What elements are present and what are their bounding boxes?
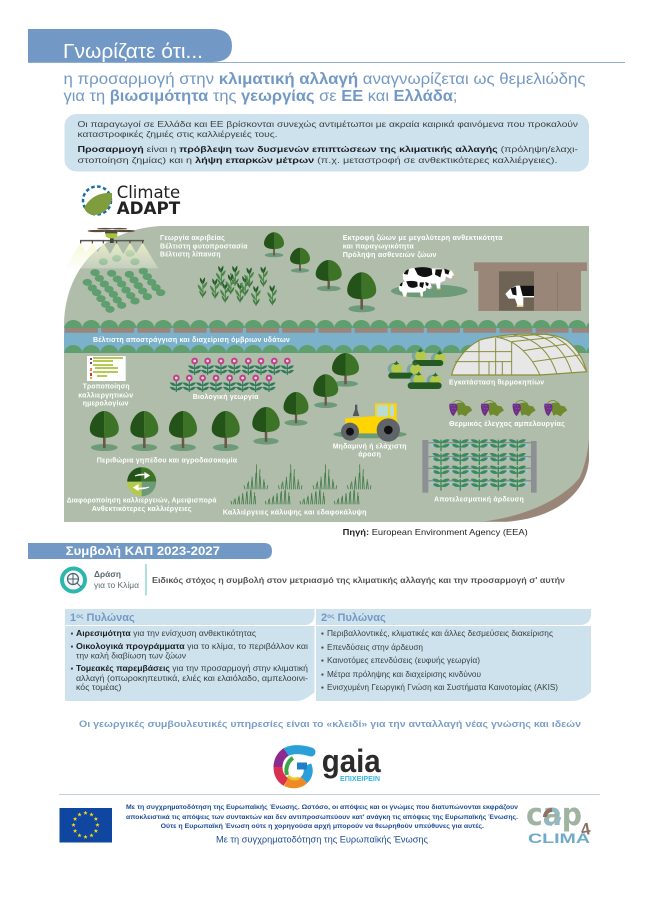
climate action label: Δράση — [94, 569, 121, 579]
upper trees — [264, 232, 376, 312]
EU funding disclaimer — [126, 804, 518, 844]
EU flag — [60, 808, 112, 842]
pillar 2 heading: 2 — [321, 612, 327, 624]
label: viticulture: Θερμικός έλεγχος αμπελουργίας — [449, 419, 565, 428]
subtitle: για τη βιωσιμότητα της γεωργίας σε ΕΕ και Ελλάδα; — [64, 88, 458, 105]
CAP4CLIMA logo: 4 — [579, 819, 592, 840]
pillar 1 heading: 1 — [70, 612, 76, 624]
pillar 2 list: Μέτρα πρόληψης και διαχείρισης κινδύνου — [327, 670, 481, 679]
label: livestock: Πρόληψη ασθενειών ζώων — [343, 250, 437, 259]
label: calendars: καλλιεργητικών — [78, 390, 133, 399]
panel: pillar 2 — [316, 609, 591, 701]
lower trees — [90, 353, 359, 451]
info box: στοποίηση ζημίας) και η λήψη επαρκών μέτρων (π.χ. μεταστροφή σε ανθεκτικότερες καλλιέργειες). — [78, 155, 558, 165]
organic flowers — [170, 358, 294, 392]
label: diversification — [67, 496, 217, 513]
pillar 2 list: Ενισχυμένη Γεωργική Γνώση και Συστήματα Καινοτομίας (AKIS) — [327, 683, 558, 692]
label: livestock — [343, 233, 503, 259]
icon: crop rotation — [127, 467, 156, 496]
icon: drone — [65, 228, 158, 268]
label: livestock: και παραγωγικότητα — [343, 241, 414, 250]
header tab — [28, 29, 232, 63]
cow in doorway — [505, 286, 534, 307]
cover crop grass — [231, 464, 371, 504]
Climate ADAPT logo: Climate — [117, 183, 180, 202]
pillar 2 list: Περιβαλλοντικές, κλιματικές και άλλες δεσμεύσεις διακείρισης — [327, 629, 553, 638]
label: greenhouse: Εγκατάσταση θερμοκηπίων — [449, 378, 544, 387]
label: precision farming: Γεωργία ακριβείας — [160, 233, 225, 242]
source note: Πηγή: European Environment Agency (EEA) — [343, 528, 528, 537]
label: organic: Βιολογική γεωργία — [193, 392, 259, 401]
pillar 2 list — [321, 629, 558, 692]
label: calendars — [78, 382, 133, 408]
adaptation landscape panel — [64, 226, 589, 522]
label: precision farming: Βέλτιστη φυτοπροστασία — [160, 241, 248, 250]
pillar 1 list: ▪ — [70, 642, 74, 651]
section heading: CAP — [28, 543, 272, 559]
pillar 1 list: κός τομέας) — [76, 683, 122, 692]
pillar 1 list — [70, 629, 308, 692]
greenhouse — [452, 334, 587, 375]
subtitle — [64, 71, 586, 105]
panel: pillar 1 — [65, 609, 314, 701]
pillar 2 heading: Πυλώνας — [334, 612, 386, 624]
label: field margins: Περιθώρια γηπέδου και αγροδασοκομία — [97, 456, 238, 465]
label: calendars: ημερολογίων — [83, 399, 129, 408]
cows in pasture — [391, 267, 468, 298]
label: precision farming: Βέλτιστη λίπανση — [160, 250, 221, 259]
tractor — [333, 403, 407, 442]
pillar 1 heading: ος — [76, 613, 84, 620]
specific objective text: Ειδικός στόχος η συμβολή στον μετριασμό της κλιματικής αλλαγής και την προσαρμογή σ' αυτήν — [152, 576, 565, 585]
subtitle: η προσαρμογή στην κλιματική αλλαγή αναγνωρίζεται ως θεμελιώδης — [64, 71, 586, 88]
label: diversification: Διαφοροποίηση καλλιεργειών, Αμειψισπορά — [67, 496, 217, 505]
EU funding disclaimer: Ούτε η Ευρωπαϊκή Ένωση ούτε η χορηγούσα αρχή μπορούν να θεωρηθούν υπεύθυνες για αυτές. — [161, 823, 484, 830]
icon: climate action — [62, 568, 85, 592]
label: no till — [333, 442, 407, 459]
section heading: CAP: Συμβολή ΚΑΠ 2023-2027 — [66, 546, 220, 558]
tomatoes — [388, 348, 445, 389]
pillar 2 list: ▪ — [321, 629, 324, 638]
info box: Οι παραγωγοί σε Ελλάδα και ΕΕ βρίσκονται συνεχώς αντιμέτωποι με ακραία καιρικά φαινόμενα που προκαλούν — [78, 119, 578, 129]
info box — [64, 114, 589, 172]
pillar 1 list: ▪ — [70, 629, 74, 638]
label: livestock: Εκτροφή ζώων με μεγαλύτερη ανθεκτικότητα — [343, 233, 503, 242]
pillar 2 list: Καινοτόμες επενδύσεις (ευφυής γεωργία) — [327, 656, 480, 665]
CAP4CLIMA logo: CLIMA — [528, 830, 590, 846]
label: calendars: Τροποποίηση — [83, 382, 130, 391]
info box: Προσαρμογή είναι η πρόβλεψη των δυσμενών επιπτώσεων της κλιματικής αλλαγής (πρόληψη/ελαχι- — [78, 144, 578, 154]
title: Γνωρίζατε ότι... — [63, 40, 203, 63]
label: no till: άροση — [358, 450, 381, 459]
pillar 1 list: την καλή διαβίωση των ζώων — [76, 652, 186, 660]
pillar 2 list: Επενδύσεις στην άρδευση — [327, 643, 423, 652]
calendar icon — [87, 356, 126, 381]
field crop rows — [83, 250, 165, 313]
CAP4CLIMA logo: cap — [526, 797, 582, 833]
pillar 1 heading: Πυλώνας — [83, 612, 135, 624]
brown corner crescent — [483, 438, 589, 522]
pillar 2 list: ▪ — [321, 683, 324, 692]
label: no till: Μηδαμινή ή ελάχιστη — [333, 442, 407, 451]
label: irrigation: Αποτελεσματική άρδευση — [434, 494, 524, 503]
info box: καταστροφικές ζημιές στις καλλιέργειές τους. — [78, 129, 278, 139]
gaia logo: gaia — [322, 743, 381, 779]
barn — [474, 262, 587, 311]
drainage channel — [64, 320, 589, 353]
label: drainage: Βέλτιστη αποστράγγιση και διαχείριση όμβριων υδάτων — [93, 335, 290, 344]
label: diversification: Ανθεκτικότερες καλλιέργειες — [92, 504, 192, 513]
gaia logo: ΕΠΙΧΕΙΡΕΙΝ — [340, 774, 380, 783]
pillar 2 list: ▪ — [321, 643, 324, 652]
pillar 2 list: ▪ — [321, 656, 324, 665]
climate action label: για το Κλίμα — [94, 580, 139, 590]
label: cover crops: Καλλιέργειες κάλυψης και εδαφοκάλυψη — [223, 508, 367, 517]
pillar 1 list: ▪ — [70, 664, 74, 673]
EU funding disclaimer: αποκλειστικά τις απόψεις των συντακτών και δεν αντιπροσωπεύουν κατ' ανάγκη τις απόψεις της Ευρωπαϊκής Ένωσης. — [126, 813, 518, 821]
Climate ADAPT logo: ADAPT — [117, 199, 181, 219]
corn plants — [198, 266, 277, 306]
advisory services statement: Οι γεωργικές συμβουλευτικές υπηρεσίες είναι το «κλειδί» για την ανταλλαγή νέας γνώσης και ιδεών — [79, 719, 581, 730]
irrigation grid — [422, 439, 537, 493]
gaia logo — [278, 743, 381, 784]
pillar 1 list: Αιρεσιμότητα για την ενίσχυση ανθεκτικότητας — [76, 629, 256, 638]
pillar 1 list: Οικολογικά προγράμματα για το κλίμα, το περιβάλλον και — [76, 642, 308, 651]
EU funding disclaimer: Με τη συγχρηματοδότηση της Ευρωπαϊκής Ένωσης. Ωστόσο, οι απόψεις και οι γνώμες που διατυπώνονται εκφράζουν — [126, 804, 518, 811]
vineyard grapes — [449, 400, 567, 416]
CAP4CLIMA logo — [526, 797, 592, 846]
pillar 2 list: ▪ — [321, 670, 324, 679]
climate action label — [94, 569, 139, 590]
pillar 1 list: Τομεακές παρεμβάσεις για την προσαρμογή στην κλιματική — [76, 664, 308, 673]
pillar 2 heading: ος — [327, 613, 335, 620]
Climate ADAPT logo — [83, 183, 181, 219]
label: precision farming — [160, 233, 248, 259]
pillar 1 list: αλλαγή (οπωροκηπευτικά, ελιές και ελαιόλαδο, αμπελοοινι- — [76, 674, 308, 683]
EU funding line: Με τη συγχρηματοδότηση της Ευρωπαϊκής Ένωσης — [216, 834, 428, 844]
